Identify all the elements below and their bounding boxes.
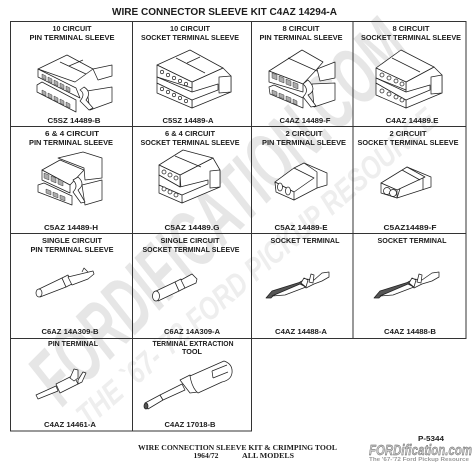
panel: terminal extraction tool: TERMINAL EXTRACTION bbox=[152, 339, 234, 348]
panel: socket terminal A: SOCKET TERMINAL bbox=[270, 236, 340, 245]
panel: 10 circuit socket terminal sleeve bbox=[132, 22, 252, 126]
icon: single circuit pin sleeve bbox=[36, 268, 94, 297]
panel: 8 circuit pin terminal sleeve: PIN TERMINAL SLEEVE bbox=[260, 33, 343, 42]
icon: socket terminal A bbox=[266, 272, 329, 298]
panel: single circuit socket terminal sleeve bbox=[132, 234, 252, 338]
icon: single circuit socket sleeve bbox=[152, 274, 197, 301]
panel: single circuit pin terminal sleeve: PIN TERMINAL SLEEVE bbox=[30, 245, 114, 254]
panel: socket terminal B: SOCKET TERMINAL bbox=[378, 236, 447, 245]
icon: pin terminal bbox=[36, 369, 86, 399]
panel: single circuit socket terminal sleeve: SINGLE CIRCUIT bbox=[160, 236, 220, 245]
panel: 2 circuit socket terminal sleeve: SOCKET TERMINAL SLEEVE bbox=[358, 138, 459, 147]
panel: 8 circuit socket terminal sleeve: C4AZ 14489.E bbox=[386, 116, 439, 125]
panel: 10 circuit pin terminal sleeve: PIN TERMINAL SLEEVE bbox=[30, 33, 115, 42]
caption: wire connection sleeve kit bbox=[138, 443, 337, 460]
panel: 2 circuit pin terminal sleeve: PIN TERMINAL SLEEVE bbox=[262, 138, 346, 147]
panel: socket terminal B: C4AZ 14488-B bbox=[384, 327, 436, 336]
panel: 6 & 4 circuit pin terminal sleeve: PIN TERMINAL SLEEVE bbox=[29, 138, 113, 147]
panel: 2 circuit socket terminal sleeve: 2 CIRCUIT bbox=[390, 129, 427, 138]
icon: 10 circuit socket connector bbox=[157, 50, 231, 108]
panel: socket terminal A bbox=[252, 234, 353, 338]
panel: 8 circuit pin terminal sleeve bbox=[252, 22, 353, 126]
panel: pin terminal bbox=[10, 338, 132, 431]
panel: 6 & 4 circuit pin terminal sleeve: 6 & 4 CIRCUIT bbox=[45, 129, 100, 138]
panel: 10 circuit socket terminal sleeve: SOCKET TERMINAL SLEEVE bbox=[141, 33, 239, 42]
panel: 6 & 4 circuit pin terminal sleeve: C5AZ 14489-H bbox=[44, 223, 98, 232]
icon: 2 circuit pin connector bbox=[275, 163, 327, 200]
logo: FORDification.com: The '67-'72 Ford Pickup Resource bbox=[369, 457, 469, 463]
panel: 2 circuit socket terminal sleeve bbox=[353, 126, 466, 234]
panel: single circuit pin terminal sleeve bbox=[10, 234, 132, 338]
icon: 10 circuit pin connector bbox=[37, 55, 112, 112]
panel: 8 circuit socket terminal sleeve bbox=[353, 22, 466, 126]
panel: 10 circuit pin terminal sleeve bbox=[10, 22, 132, 126]
panel: 6 & 4 circuit socket terminal sleeve: 6 & 4 CIRCUIT bbox=[165, 129, 215, 138]
panel: pin terminal: C4AZ 14461-A bbox=[44, 420, 97, 429]
panel: 8 circuit socket terminal sleeve: SOCKET TERMINAL SLEEVE bbox=[361, 33, 461, 42]
panel: 10 circuit socket terminal sleeve: C5SZ 14489-A bbox=[162, 116, 214, 125]
panel: terminal extraction tool: C4AZ 17018-B bbox=[164, 420, 216, 429]
caption: wire connection sleeve kit: ALL MODELS bbox=[242, 451, 294, 460]
panel: 6 & 4 circuit socket terminal sleeve: SOCKET TERMINAL SLEEVE bbox=[140, 138, 240, 147]
panel: pin terminal: PIN TERMINAL bbox=[48, 339, 98, 348]
panel: 8 circuit pin terminal sleeve: C4AZ 14489-F bbox=[280, 116, 331, 125]
icon: 6 & 4 circuit pin connector bbox=[38, 152, 102, 205]
icon: 2 circuit socket connector bbox=[381, 167, 431, 198]
icon: 8 circuit pin connector bbox=[269, 50, 335, 108]
icon: socket terminal B bbox=[374, 272, 439, 298]
icon: terminal extraction tool bbox=[144, 361, 232, 409]
icon: 8 circuit socket connector bbox=[376, 50, 442, 108]
panel: socket terminal B bbox=[353, 234, 466, 338]
panel: single circuit pin terminal sleeve: SINGLE CIRCUIT bbox=[42, 236, 102, 245]
panel: 2 circuit pin terminal sleeve: 2 CIRCUIT bbox=[286, 129, 323, 138]
panel: single circuit pin terminal sleeve: C6AZ 14A309-B bbox=[42, 327, 98, 336]
panel: terminal extraction tool: TOOL bbox=[182, 347, 202, 356]
panel: 2 circuit pin terminal sleeve bbox=[252, 126, 353, 234]
panel: 10 circuit pin terminal sleeve: 10 CIRCUIT bbox=[52, 24, 92, 33]
panel: socket terminal A: C4AZ 14488-A bbox=[275, 327, 328, 336]
panel: single circuit socket terminal sleeve: C6AZ 14A309-A bbox=[164, 327, 221, 336]
caption: wire connection sleeve kit: WIRE CONNECTION SLEEVE KIT & CRIMPING TOOL bbox=[138, 443, 337, 452]
panel: 8 circuit pin terminal sleeve: 8 CIRCUIT bbox=[282, 24, 320, 33]
caption: wire connection sleeve kit: 1964/72 bbox=[194, 451, 219, 460]
panel: 10 circuit pin terminal sleeve: C5SZ 14489-B bbox=[48, 116, 100, 125]
figure number: P-5344 bbox=[418, 434, 445, 443]
panel: 2 circuit pin terminal sleeve: C5AZ 14489-E bbox=[274, 223, 328, 232]
panel: 6 & 4 circuit socket terminal sleeve bbox=[132, 126, 252, 234]
panel: 6 & 4 circuit pin terminal sleeve bbox=[10, 126, 132, 234]
panel: 10 circuit socket terminal sleeve: 10 CIRCUIT bbox=[170, 24, 210, 33]
panel: single circuit socket terminal sleeve: SOCKET TERMINAL SLEEVE bbox=[142, 245, 240, 254]
panel: 6 & 4 circuit socket terminal sleeve: C5AZ 14489.G bbox=[164, 223, 220, 232]
panel: 2 circuit socket terminal sleeve: C5AZ14489-F bbox=[384, 223, 437, 232]
panel: terminal extraction tool bbox=[132, 338, 252, 431]
title: WIRE CONNECTOR SLEEVE KIT C4AZ 14294-A bbox=[112, 7, 337, 18]
panel: 8 circuit socket terminal sleeve: 8 CIRCUIT bbox=[392, 24, 430, 33]
icon: 6 & 4 circuit socket connector bbox=[159, 150, 220, 203]
